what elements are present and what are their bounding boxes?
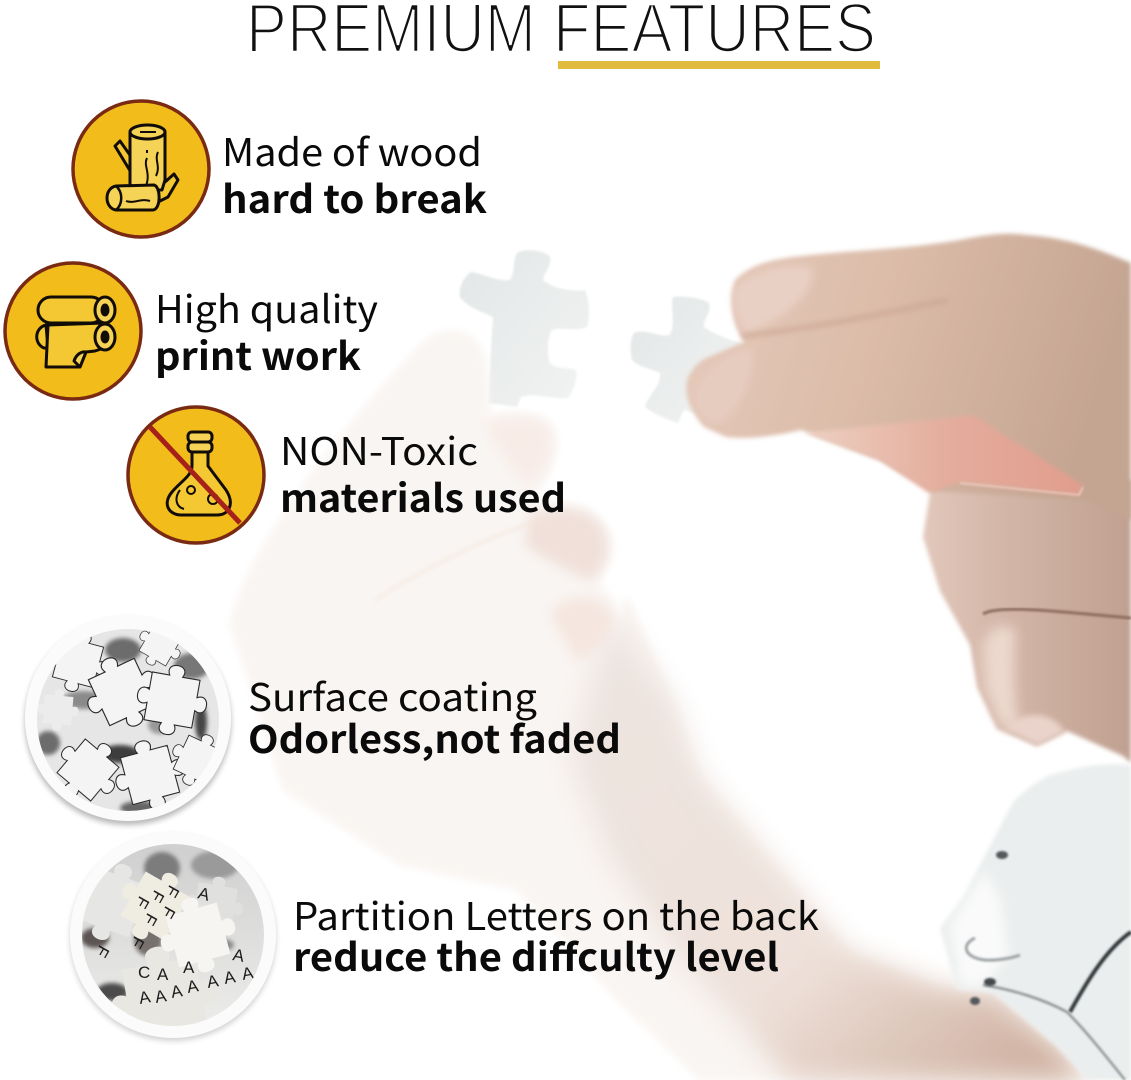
feature: made of wood [73,101,487,237]
photo badge: white puzzle pieces [25,615,234,825]
photo badge: puzzle pieces with letters: A [153,986,169,1007]
text: partition letters: Partition Letters on the back [293,886,819,941]
photo badge: puzzle pieces with letters: A [205,971,221,992]
photo badge: puzzle pieces with letters: A [183,958,195,977]
photo badge: puzzle pieces with letters: A [240,963,256,984]
photo badge: puzzle pieces with letters [68,844,278,1044]
feature: high quality print [5,263,378,399]
icon: paper rolls [5,263,141,399]
icon: crossed-out bottle [128,407,264,543]
photo badge: puzzle pieces with letters: A [169,981,185,1002]
feature: non toxic [128,407,566,543]
text: surface coating [248,667,621,764]
text: surface coating: Surface coating [248,667,537,722]
photo: puzzle piece in right hand [631,297,742,423]
photo badge: puzzle pieces with letters: F [131,893,153,911]
photo badge: puzzle pieces with letters: A [157,965,169,984]
feature: partition letters [68,844,818,1044]
photo badge: puzzle pieces with letters: A [196,884,212,905]
photo badge: puzzle pieces with letters: A [185,976,201,997]
text: high quality: print work [155,326,361,381]
feature: surface coating [25,615,621,825]
text: non-toxic: NON-Toxic [280,421,478,476]
text: surface coating: Odorless,not faded [248,709,621,764]
photo badge: puzzle pieces with letters: F [146,887,168,905]
photo badge: puzzle pieces with letters: F [91,942,113,960]
photo badge: puzzle pieces with letters: A [222,967,238,988]
photo badge: puzzle pieces with letters: F [161,882,183,900]
text: made of wood [222,122,487,224]
photo badge: puzzle pieces with letters: F [139,910,161,928]
photo: pale left hand and wrist [230,331,1087,1080]
text: non-toxic [280,421,566,523]
title underline [558,61,880,69]
icon: wood logs [73,101,209,237]
text: high quality: High quality [155,279,378,334]
photo badge: puzzle pieces with letters: C [138,963,150,982]
photo badge: puzzle pieces with letters: A [137,987,153,1008]
photo badge: puzzle pieces with letters: F [157,903,179,921]
text: high quality [155,279,378,381]
photo: puzzle piece in left hand [460,250,589,407]
text: partition letters [293,886,819,982]
text: made of wood: hard to break [222,169,487,224]
photo: sleeve [940,764,1131,1080]
text: made of wood: Made of wood [222,122,482,177]
photo: right hand holding a puzzle piece [686,234,1131,763]
photo badge: puzzle pieces with letters: F [126,933,148,951]
text: partition letters: reduce the diffculty level [293,927,779,982]
photo badge: puzzle pieces with letters: A [231,945,246,966]
text: non-toxic: materials used [280,468,566,523]
